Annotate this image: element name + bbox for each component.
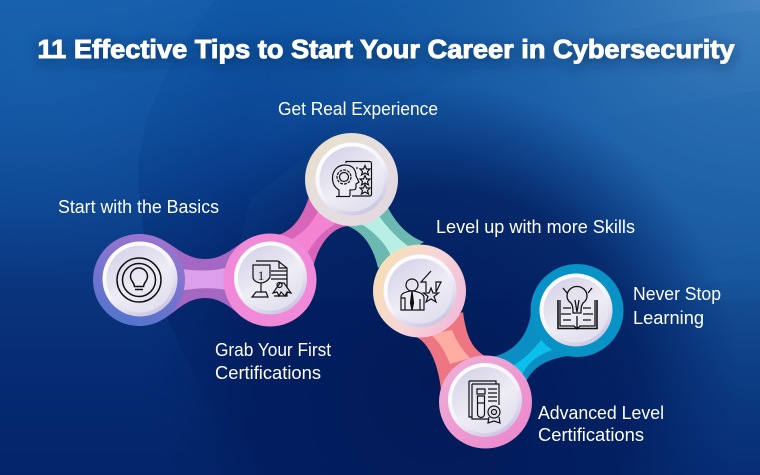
- disc: [316, 142, 388, 216]
- connector: advanced to never stop: [492, 305, 585, 384]
- number one: 1: [258, 268, 264, 283]
- outer ring: [530, 264, 624, 357]
- label: never stop learning: Learning: [633, 308, 704, 328]
- outer ring: [305, 133, 398, 226]
- step: first certifications: [224, 234, 316, 326]
- connector: skills to advanced: [412, 312, 490, 390]
- connector: certifications to experience: [275, 197, 350, 268]
- icon: open book with bulb: [558, 286, 597, 329]
- icon: head, gear and stars: [332, 162, 372, 196]
- step: never stop learning: [530, 264, 624, 357]
- disc: [234, 242, 307, 314]
- label: level up: Level up with more Skills: [436, 217, 635, 237]
- disc: [540, 274, 612, 346]
- icon: trophy and certificate: [252, 261, 291, 297]
- icon: certificate document: [469, 381, 500, 423]
- outer ring: [373, 244, 466, 338]
- label: start with the basics: Start with the Basics: [58, 197, 219, 217]
- title: 11 Effective Tips to Start Your Career in Cybersecurity: [38, 34, 735, 64]
- step: start with the basics: [93, 234, 185, 326]
- disc: [102, 242, 178, 316]
- label: advanced certifications: Advanced Level: [538, 403, 664, 423]
- icon: light bulb: [117, 258, 161, 302]
- label: never stop learning: Never Stop: [633, 284, 721, 304]
- outer ring: [224, 234, 316, 326]
- disc: [384, 254, 456, 328]
- outer ring: [439, 356, 532, 448]
- step: level up: [373, 244, 466, 338]
- label: first certifications: Certifications: [215, 363, 321, 383]
- connector: experience to skills: [347, 204, 424, 268]
- outer ring: [93, 234, 185, 326]
- disc: [448, 363, 522, 437]
- step: advanced certifications: [439, 356, 532, 448]
- label: get real experience: Get Real Experience: [278, 99, 438, 119]
- label: advanced certifications: Certifications: [538, 425, 644, 445]
- connector: basics to certifications: [139, 234, 270, 326]
- step: real experience: [305, 133, 398, 226]
- label: first certifications: Grab Your First: [215, 340, 331, 360]
- icon: person with arrow and star: [401, 271, 441, 310]
